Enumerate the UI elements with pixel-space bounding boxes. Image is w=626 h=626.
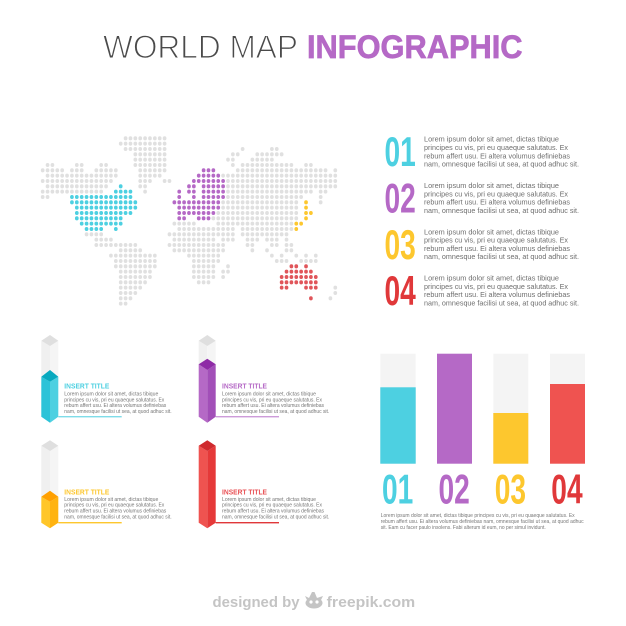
footer credit: designed by (212, 594, 300, 611)
bar 01: 01 (382, 466, 413, 513)
text block: rebum affert usu. Ei altera volumus definiebas (222, 508, 324, 514)
text block: nam, omnesque facilisi ut sea, at quod adhuc sit. (64, 514, 172, 520)
text block: rebum affert usu. Ei altera volumus definiebas (64, 508, 167, 514)
text block: Lorem ipsum dolor sit amet, dictas tibique (222, 392, 316, 398)
map dots: Japan highlight (296, 202, 311, 229)
text block: Lorem ipsum dolor sit amet, dictas tibique (64, 497, 158, 503)
list item 02: principes cu vis, pri eu quaeque salutatus. Ex (424, 189, 568, 198)
list item 04: nam, omnesque facilisi ut sea, at quod adhuc sit. (424, 298, 579, 308)
isometric panel: cyan (41, 335, 172, 423)
bar 03 (493, 354, 528, 513)
chart caption: Lorem ipsum dolor sit amet, dictas tibique principes cu vis, pri eu quaeque salutatus. Ex (381, 513, 575, 519)
text block: principes cu vis, pri eu quaeque salutatus. Ex (222, 503, 322, 509)
list item 04: Lorem ipsum dolor sit amet, dictas tibique (424, 274, 559, 283)
title (103, 29, 522, 65)
isometric panel: red (199, 440, 329, 528)
heading: INSERT TITLE (222, 487, 267, 496)
map dots: land (43, 138, 335, 304)
text block: nam, omnesque facilisi ut sea, at quod adhuc sit. (222, 409, 329, 415)
chart caption (381, 513, 584, 531)
list item 03: rebum affert usu. Ei altera volumus definiebas (424, 244, 570, 253)
text block: principes cu vis, pri eu quaeque salutatus. Ex (222, 397, 322, 403)
text block (222, 497, 329, 520)
list item 02: 02 (384, 175, 416, 222)
list item 04 (384, 267, 579, 314)
chart caption: rebum affert usu. Ei altera volumus definiebas nam, omnesque facilisi ut sea, at quod adhuc (381, 519, 584, 525)
text block: nam, omnesque facilisi ut sea, at quod adhuc sit. (222, 514, 329, 520)
bar 02 (437, 354, 472, 513)
text block: rebum affert usu. Ei altera volumus definiebas (64, 403, 167, 409)
isometric column: red (199, 440, 216, 528)
text block: principes cu vis, pri eu quaeque salutatus. Ex (64, 503, 165, 509)
list item 01: 01 (384, 128, 416, 175)
bar chart (380, 354, 585, 513)
text block (64, 392, 172, 415)
text block: nam, omnesque facilisi ut sea, at quod adhuc sit. (64, 409, 172, 415)
map dots: Europe highlight (174, 170, 223, 218)
text block (64, 497, 172, 520)
isometric column: yellow (41, 440, 58, 528)
chart caption: sit. Eam cu facer paulo insolens. Fabi alterum id eum, no per simul invidunt. (381, 525, 546, 531)
footer credit (212, 592, 415, 611)
list item 04: 04 (384, 267, 416, 314)
isometric column: cyan (41, 335, 58, 423)
title: INFOGRAPHIC (307, 29, 522, 65)
bar 04 (550, 354, 585, 513)
isometric column: purple (199, 335, 216, 423)
text block: rebum affert usu. Ei altera volumus definiebas (222, 403, 324, 409)
list item 03: Lorem ipsum dolor sit amet, dictas tibique (424, 227, 559, 236)
bar 02: 02 (438, 466, 470, 513)
dotted world map (43, 138, 335, 304)
icon: freepik mascot (305, 592, 323, 608)
list item 03: 03 (384, 221, 416, 268)
list item 01 (384, 128, 579, 175)
isometric panel: yellow (41, 440, 172, 528)
isometric panel: purple (199, 335, 329, 423)
bar 01 (380, 354, 416, 513)
list item 01: nam, omnesque facilisi ut sea, at quod adhuc sit. (424, 160, 579, 169)
list item 02: rebum affert usu. Ei altera volumus definiebas (424, 198, 570, 207)
heading: INSERT TITLE (222, 381, 267, 390)
text block: Lorem ipsum dolor sit amet, dictas tibique (222, 497, 316, 503)
list item 02: nam, omnesque facilisi ut sea, at quod adhuc sit. (424, 206, 579, 215)
list item 01: rebum affert usu. Ei altera volumus definiebas (424, 151, 570, 160)
title: WORLD MAP (103, 29, 298, 65)
text block: principes cu vis, pri eu quaeque salutatus. Ex (64, 397, 165, 403)
list item 04: rebum affert usu. Ei altera volumus definiebas (424, 290, 570, 299)
footer credit: freepik.com (327, 594, 415, 611)
text block: Lorem ipsum dolor sit amet, dictas tibique (64, 392, 158, 398)
list item 02 (384, 175, 579, 222)
numbered list (384, 128, 579, 314)
list item 03: principes cu vis, pri eu quaeque salutatus. Ex (424, 236, 568, 245)
list item 03: nam, omnesque facilisi ut sea, at quod adhuc sit. (424, 252, 579, 261)
text block (222, 392, 329, 415)
list item 03 (384, 221, 579, 268)
heading: INSERT TITLE (64, 381, 109, 390)
list item 02: Lorem ipsum dolor sit amet, dictas tibique (424, 181, 559, 190)
list item 01: principes cu vis, pri eu quaeque salutatus. Ex (424, 143, 568, 152)
map dots: Australia highlight (282, 266, 316, 298)
heading: INSERT TITLE (64, 487, 109, 496)
bar 03: 03 (495, 466, 526, 513)
bar 04: 04 (551, 466, 583, 513)
list item 01: Lorem ipsum dolor sit amet, dictas tibique (424, 135, 559, 144)
map dots: Americas highlight (72, 186, 135, 229)
list item 04: principes cu vis, pri eu quaeque salutatus. Ex (424, 282, 568, 291)
